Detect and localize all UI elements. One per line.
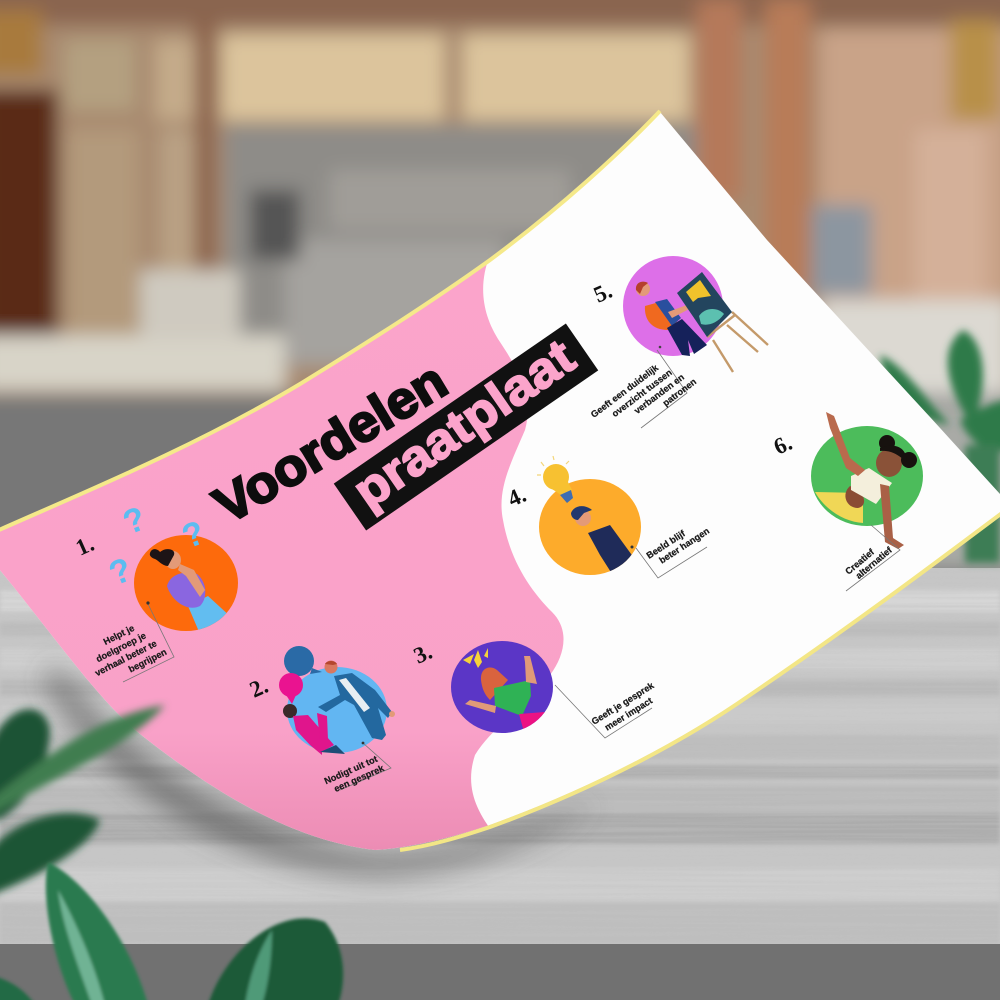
leader line 6	[846, 525, 900, 591]
figure: man in suit	[318, 660, 395, 740]
yellow edge top	[0, 111, 660, 534]
text 1: verhaal beter te	[93, 638, 158, 678]
blurred room background	[0, 0, 1000, 570]
icon: question marks: ?	[118, 499, 151, 542]
item 3	[410, 639, 553, 733]
title banner: praatplaat: praatplaat	[343, 328, 585, 519]
text 3: Geeft je gesprek	[590, 680, 656, 727]
text 4: Beeld blijf	[645, 528, 688, 561]
callout 2	[323, 742, 391, 796]
leader line 3	[555, 685, 652, 738]
text 6: Creatief	[843, 546, 877, 577]
leader line 1	[123, 604, 174, 682]
figure: painter	[636, 282, 707, 356]
poster shadow on table	[50, 660, 600, 875]
figure: cheering woman	[465, 656, 545, 732]
number 2: 2.	[246, 673, 272, 703]
figure: man with arms crossed	[588, 525, 632, 571]
leader line 2	[340, 743, 391, 790]
callout 4	[630, 516, 711, 578]
icon: speech bubbles	[284, 646, 314, 676]
icon: question marks: ?	[177, 513, 210, 556]
poster sheet white	[0, 112, 1000, 850]
poster	[0, 111, 1000, 880]
circle light blue	[287, 667, 387, 753]
text 6: alternatief	[854, 544, 895, 581]
text 5: verbanden en	[632, 372, 686, 416]
circle yellow-orange	[539, 479, 641, 575]
figure: dancing woman	[815, 412, 917, 549]
text 5: patronen	[661, 376, 699, 408]
yellow edge bottom	[400, 507, 1000, 850]
item 2	[246, 646, 395, 755]
item 5	[590, 256, 768, 372]
text 5: Geeft een duidelijk	[589, 362, 661, 420]
text 2: een gesprek	[332, 763, 386, 794]
icon: light bulb	[537, 456, 573, 503]
item 1	[76, 508, 238, 631]
wooden table top	[0, 568, 1000, 1000]
icon: question marks	[104, 499, 210, 593]
leader line 5	[641, 350, 687, 428]
icon: easel with painting	[677, 272, 768, 372]
callout 1	[82, 601, 174, 689]
figure: thinking woman	[167, 564, 226, 630]
text 1: doelgroep je	[94, 630, 148, 664]
text 2: Nodigt uit tot	[323, 754, 379, 786]
number 4: 4.	[504, 482, 530, 512]
circle green	[811, 426, 923, 526]
text 1: Helpt je	[102, 623, 136, 647]
item 4	[504, 456, 641, 577]
callout 5	[589, 346, 699, 447]
number 3: 3.	[410, 639, 436, 669]
number 1: 1.	[72, 531, 98, 561]
leader line 4	[636, 547, 707, 578]
title: Voordelen: Voordelen	[204, 352, 457, 535]
callout 6	[843, 525, 900, 591]
icon: lightning bolts	[463, 648, 488, 668]
text 4: beter hangen	[657, 526, 711, 566]
wood grain	[0, 568, 1000, 944]
number 5: 5.	[590, 278, 616, 308]
circle orange	[134, 535, 238, 631]
text 3: meer impact	[603, 695, 654, 733]
item 6	[770, 412, 923, 549]
figure: woman in pink	[283, 704, 345, 755]
callout 3	[555, 680, 663, 738]
text 5: overzicht tussen	[610, 367, 674, 419]
plant behind poster, right	[880, 330, 1000, 563]
circle purple	[451, 641, 553, 733]
foreground leaves, bottom left	[0, 705, 343, 1000]
circle violet	[623, 256, 723, 356]
text 1: begrijpen	[127, 647, 169, 674]
number 6: 6.	[770, 430, 796, 460]
pink wave panel	[0, 255, 564, 880]
icon: question marks: ?	[104, 550, 137, 593]
